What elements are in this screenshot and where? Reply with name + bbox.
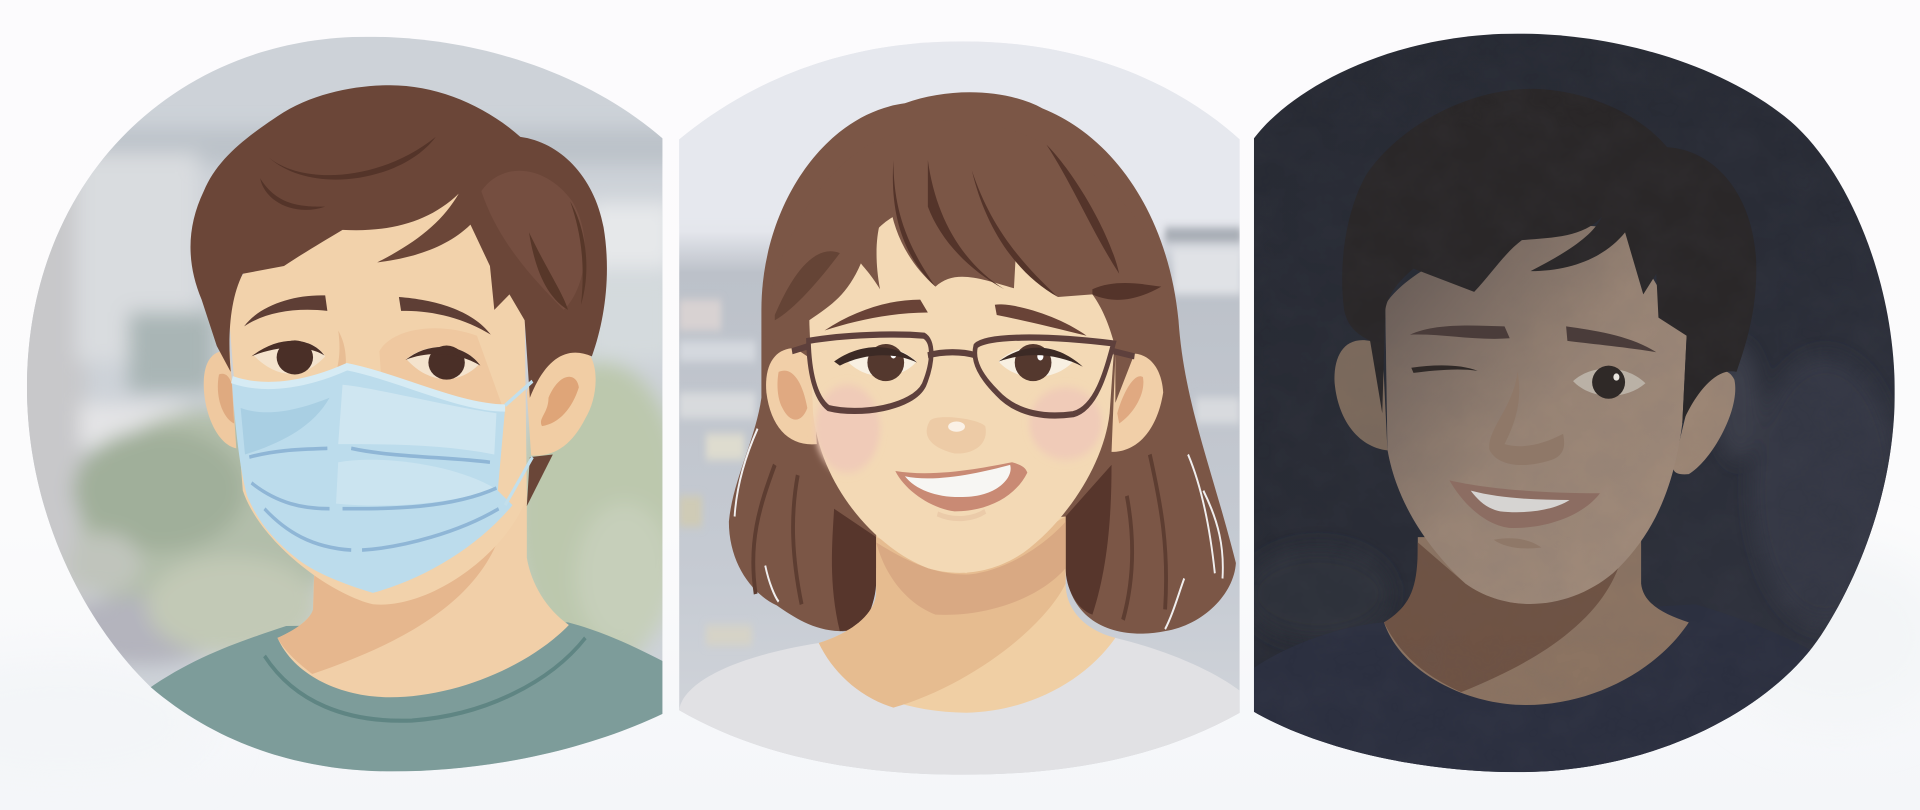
glasses	[792, 335, 1134, 416]
blurred city background	[679, 42, 1240, 774]
dark smoky background	[1254, 34, 1895, 772]
eyebrows	[244, 295, 491, 335]
neck	[819, 516, 1115, 713]
left ear	[204, 351, 236, 448]
face mask	[232, 367, 532, 593]
hair	[190, 85, 607, 398]
panel: boy with face mask	[27, 36, 662, 772]
nose	[1489, 372, 1564, 465]
hair behind ear	[527, 455, 553, 506]
cheeks	[815, 385, 1102, 473]
panel: girl with glasses	[679, 42, 1240, 775]
mouth	[895, 462, 1027, 519]
shirt	[680, 638, 1240, 774]
eyebrows	[1410, 325, 1656, 352]
hair	[1342, 89, 1756, 424]
shirt	[150, 622, 662, 772]
figure	[147, 85, 668, 810]
eyebrows	[825, 300, 1087, 336]
eyes	[251, 340, 480, 380]
fringe and hair over forehead	[774, 146, 1161, 403]
panel: boy in dark smoke, winking	[1254, 34, 1895, 772]
right ear	[1673, 371, 1735, 474]
face	[1385, 226, 1687, 604]
shirt	[1254, 622, 1810, 772]
left ear	[766, 348, 817, 444]
face	[229, 191, 527, 605]
right ear	[1112, 353, 1163, 452]
mouth	[1449, 480, 1600, 548]
smoke texture	[1240, 0, 1920, 810]
hair back	[729, 92, 1236, 634]
nose	[927, 417, 986, 454]
face	[809, 203, 1115, 573]
right ear	[527, 347, 596, 456]
open eye	[1573, 366, 1645, 399]
neck	[1384, 537, 1689, 705]
blurred city and tree background	[27, 36, 662, 772]
neck	[277, 491, 569, 697]
winking eye	[1411, 365, 1478, 373]
eyes	[834, 344, 1083, 381]
left ear	[1334, 340, 1387, 450]
